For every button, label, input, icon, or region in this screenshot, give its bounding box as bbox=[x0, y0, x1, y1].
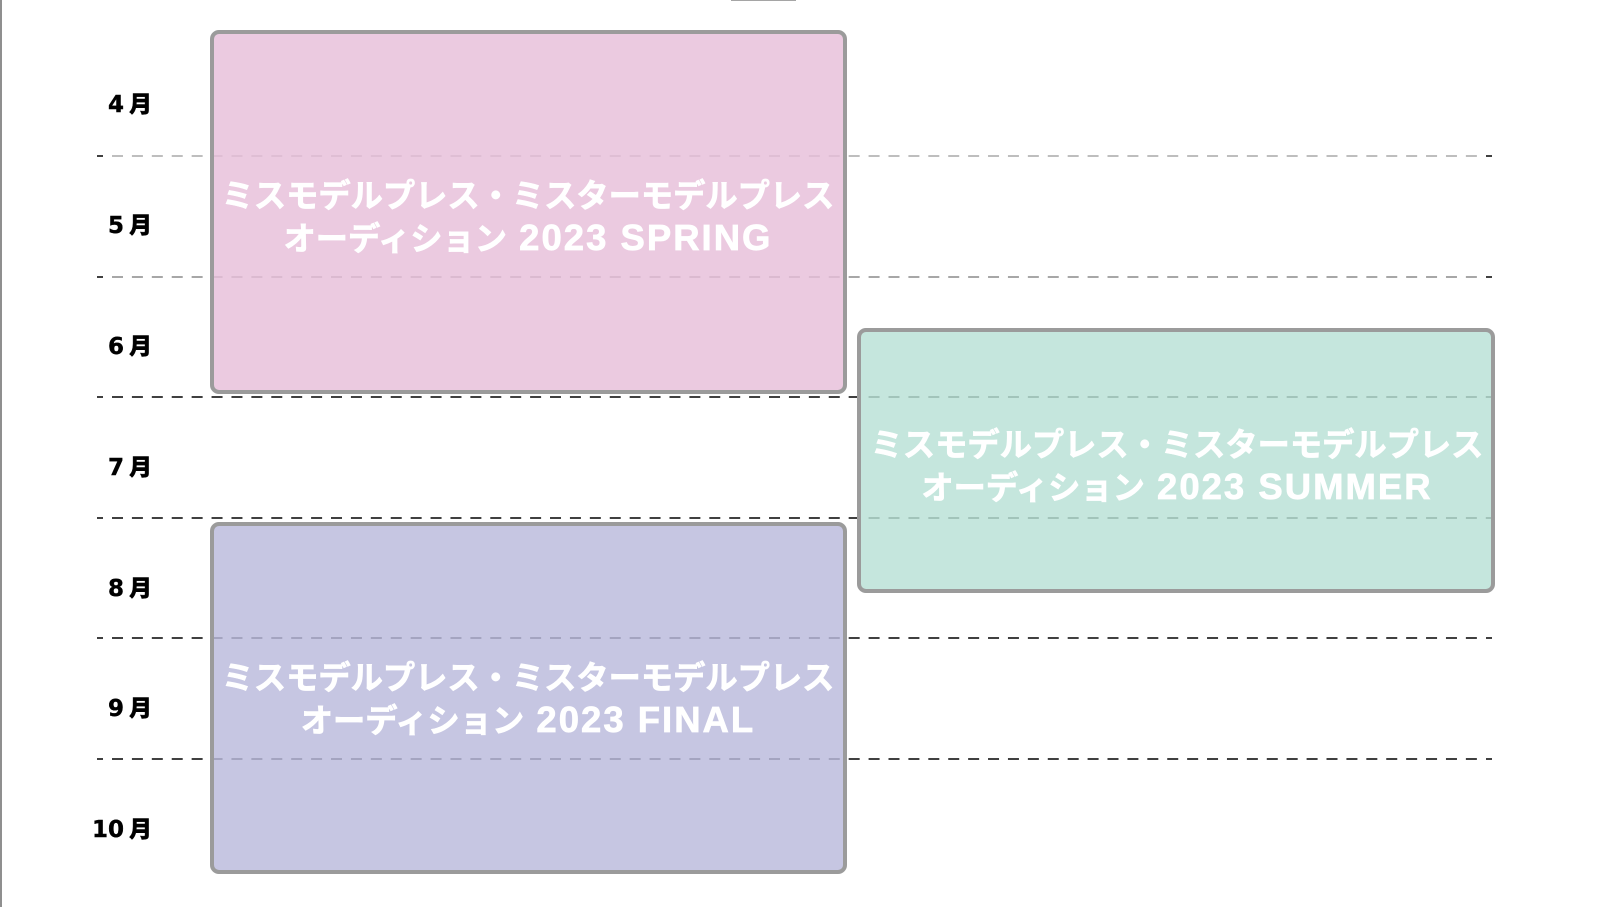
panel: 2023 final audition bbox=[210, 522, 847, 874]
label: October: 10月 bbox=[92, 810, 152, 844]
text: final audition name bbox=[222, 660, 834, 740]
label: June: 6月 bbox=[108, 327, 152, 361]
top edge tab bbox=[731, 0, 796, 1]
left axis line bbox=[0, 0, 2, 907]
month labels bbox=[92, 85, 152, 844]
text: spring audition name: オーディション 2023 SPRING bbox=[284, 217, 772, 258]
text: final audition name: オーディション 2023 FINAL bbox=[301, 699, 755, 740]
label: August: 8月 bbox=[108, 569, 152, 603]
label: April: 4月 bbox=[108, 85, 152, 119]
panel: 2023 spring audition bbox=[210, 30, 847, 394]
text: summer audition name: オーディション 2023 SUMMER bbox=[921, 466, 1433, 507]
text: spring audition name bbox=[222, 178, 834, 258]
text: final audition name: ミスモデルプレス・ミスターモデルプレス bbox=[222, 660, 834, 696]
label: July: 7月 bbox=[108, 448, 152, 482]
panel: 2023 summer audition bbox=[857, 328, 1495, 593]
text: spring audition name: ミスモデルプレス・ミスターモデルプレス bbox=[222, 178, 834, 214]
text: summer audition name bbox=[871, 427, 1483, 507]
label: September: 9月 bbox=[108, 689, 152, 723]
text: summer audition name: ミスモデルプレス・ミスターモデルプレス bbox=[871, 427, 1483, 463]
label: May: 5月 bbox=[108, 206, 152, 240]
